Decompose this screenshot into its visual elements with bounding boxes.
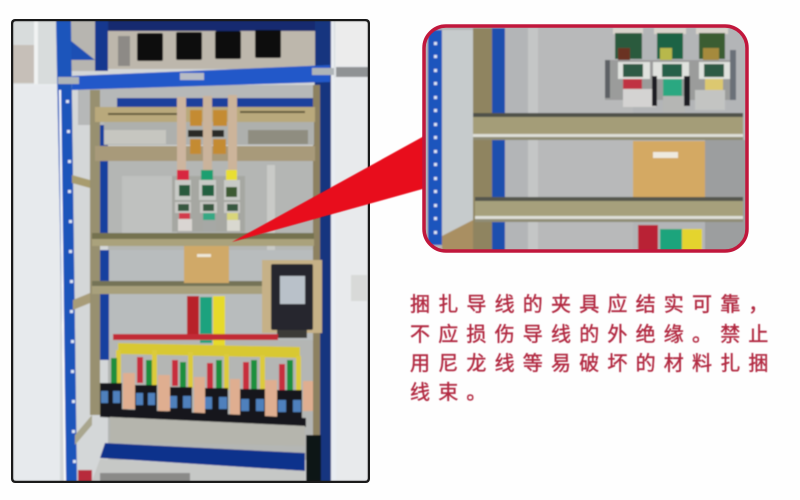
tan rails bbox=[92, 107, 315, 294]
salmon separators bbox=[123, 373, 313, 417]
background window top left bbox=[13, 21, 57, 84]
grey back panel bbox=[528, 28, 538, 251]
molded case breakers row bbox=[100, 357, 302, 420]
left blue column bbox=[56, 21, 77, 481]
coloured vertical bars bbox=[187, 296, 225, 348]
cabinet interior bbox=[60, 21, 335, 481]
red callout arrow bbox=[232, 135, 426, 242]
text block: wiring clamp guidance bbox=[410, 293, 777, 404]
blue channel bbox=[492, 28, 505, 251]
tan box bbox=[184, 246, 229, 283]
electric meter bbox=[262, 260, 322, 338]
tan upright bbox=[473, 28, 492, 251]
icon: black insulators bbox=[137, 30, 281, 61]
text block: wiring clamp guidance: 线束。 bbox=[410, 381, 495, 404]
coloured bars at bottom bbox=[638, 225, 702, 251]
text block: wiring clamp guidance: 用尼龙线等易破坏的材料扎捆 bbox=[410, 352, 777, 375]
tan box bbox=[633, 141, 705, 201]
lower busbars bbox=[113, 334, 301, 392]
panel: full cabinet photo bbox=[11, 19, 370, 483]
breakers upper bbox=[172, 170, 245, 232]
right door bbox=[335, 66, 368, 302]
blue upright bbox=[428, 30, 442, 245]
panel: zoomed inset photo bbox=[424, 26, 747, 251]
copper busbars bbox=[177, 95, 237, 172]
text block: wiring clamp guidance: 捆扎导线的夹具应结实可靠， bbox=[410, 293, 777, 316]
text block: wiring clamp guidance: 不应损伤导线的外绝缘。禁止 bbox=[410, 323, 777, 346]
lower compartment bbox=[78, 408, 321, 481]
right navy column bbox=[314, 21, 332, 481]
blue crossbar bbox=[58, 65, 334, 125]
inset red rounded frame bbox=[424, 26, 747, 251]
lower tan rail bbox=[475, 197, 743, 222]
tan vertical rails bbox=[72, 85, 320, 445]
upper breakers bbox=[605, 28, 736, 112]
left door bbox=[13, 86, 60, 481]
top compartment bbox=[70, 21, 315, 71]
upper tan rail bbox=[473, 113, 743, 140]
pale side panel bbox=[442, 30, 473, 250]
back panel bbox=[108, 160, 313, 460]
